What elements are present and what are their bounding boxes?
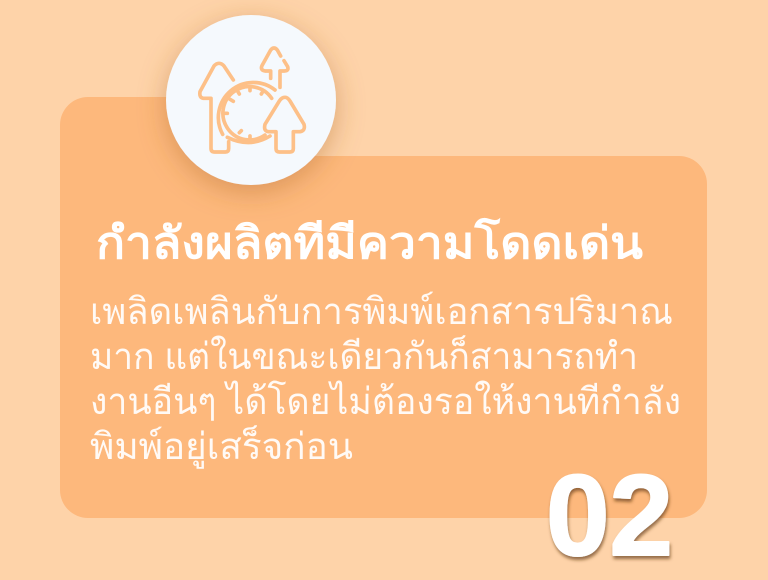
icon: clock with rising arrows [200, 48, 304, 152]
panel: card [60, 97, 707, 518]
body line 4: พิมพ์อยู่เสร็จก่อน [90, 423, 353, 469]
body line 2: มาก แต่ในขณะเดียวกันก็สามารถทำ [90, 333, 638, 377]
title: กำลังผลิตทีมีความโดดเด่น [96, 216, 643, 268]
body line 3: งานอีนๆ ได้โดยไม่ต้องรอให้งานทีกำลัง [90, 380, 681, 422]
icon badge circle [166, 15, 336, 185]
body text [90, 291, 681, 469]
body line 1: เพลิดเพลินกับการพิมพ์เอกสารปริมาณ [90, 291, 673, 332]
number 02: 02 [546, 452, 673, 580]
